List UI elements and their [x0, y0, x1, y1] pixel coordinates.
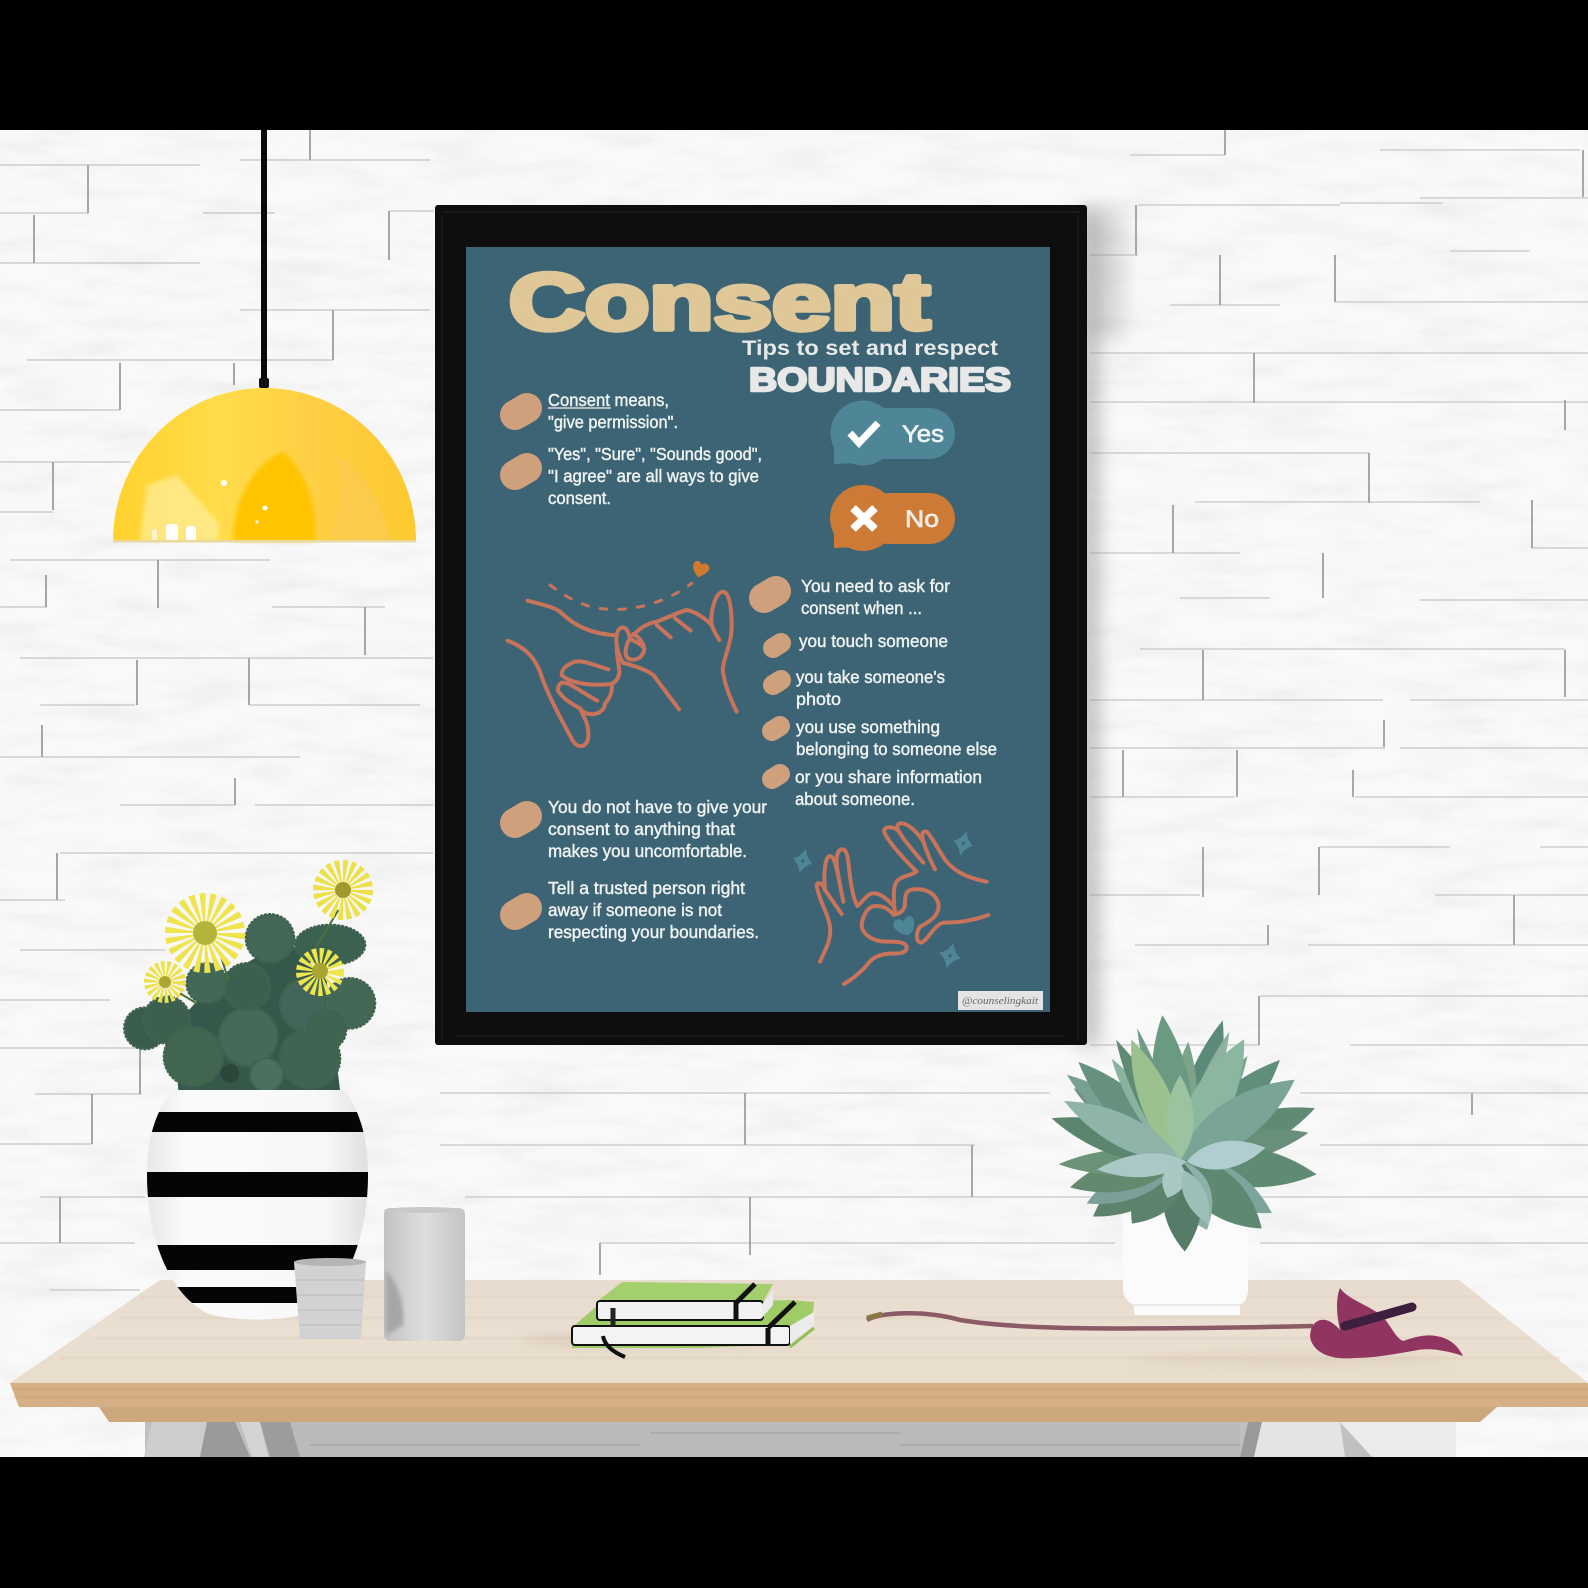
table front edge	[10, 1383, 1588, 1407]
lower notebook	[572, 1300, 814, 1348]
table top	[10, 1280, 1588, 1383]
item: information: about someone.	[795, 789, 915, 809]
area under the table	[145, 1422, 1456, 1457]
bullet	[772, 774, 780, 779]
illustration: pinky promise hands	[508, 561, 737, 746]
tip: uncomfortable: You do not have to give your	[548, 797, 767, 817]
bullet	[773, 643, 781, 648]
black wooden frame	[435, 205, 1087, 1045]
tip: consent means	[548, 390, 678, 432]
icon: sparkles	[790, 829, 976, 972]
icon: yes speech bubble: Yes	[902, 421, 944, 448]
definition tips	[515, 390, 762, 508]
tip: trusted person: away if someone is not	[548, 900, 722, 920]
need consent list	[764, 576, 997, 809]
tip: uncomfortable: consent to anything that	[548, 819, 735, 839]
vase body	[147, 1090, 368, 1320]
tip: consent means: "give permission".	[548, 412, 678, 432]
lamp shade	[113, 388, 416, 541]
lower tips	[515, 797, 767, 942]
bullet	[515, 408, 527, 415]
concrete cup	[294, 1258, 366, 1339]
concrete cylinder	[384, 1207, 465, 1341]
poster background	[466, 247, 1050, 1012]
bloom	[1310, 1288, 1463, 1358]
succulent leaves	[1047, 1013, 1322, 1253]
tip: ways to give consent: "I agree" are all ways to give	[548, 466, 759, 486]
item: information	[795, 767, 982, 809]
item: photo	[796, 667, 945, 709]
upper notebook	[598, 1282, 773, 1304]
anthurium flower	[867, 1288, 1463, 1358]
intro text	[801, 576, 950, 618]
tip: trusted person: Tell a trusted person right	[548, 878, 745, 898]
bullet	[764, 591, 776, 598]
tip: uncomfortable	[548, 797, 767, 861]
watermark: @counselingkait	[962, 995, 1039, 1007]
bullet	[515, 908, 527, 915]
frame shadow	[1080, 208, 1125, 1045]
icon: no speech bubble: No	[905, 506, 939, 533]
flowers	[154, 875, 358, 992]
watermark	[958, 991, 1043, 1010]
heading: BOUNDARIES: BOUNDARIES	[749, 361, 1011, 398]
bullet	[772, 726, 780, 731]
notebooks	[572, 1282, 814, 1357]
tip: uncomfortable: makes you uncomfortable.	[548, 841, 747, 861]
tip: ways to give consent: consent.	[548, 488, 611, 508]
tip: trusted person: respecting your boundaries.	[548, 922, 759, 942]
plant leaves	[124, 910, 375, 1092]
lamp	[113, 130, 416, 542]
table under rail	[99, 1407, 1497, 1422]
table	[10, 1280, 1588, 1457]
item: photo: you take someone's	[796, 667, 945, 687]
tip: consent means: Consent means,	[548, 390, 669, 410]
icon: small heart	[893, 916, 914, 935]
bullet	[515, 816, 527, 823]
item: belongings: belonging to someone else	[796, 739, 997, 759]
succulent plant in white pot	[1047, 1013, 1322, 1315]
item: belongings	[796, 717, 997, 759]
spadix	[1345, 1307, 1412, 1326]
tip: ways to give consent	[548, 444, 762, 508]
bullet	[773, 680, 781, 685]
tip: ways to give consent: "Yes", "Sure", "Sounds good",	[548, 444, 762, 464]
item: photo: photo	[796, 689, 841, 709]
intro text: You need to ask for	[801, 576, 950, 596]
lamp cord	[261, 130, 267, 383]
intro text: consent when ...	[801, 598, 922, 618]
item: information: or you share information	[795, 767, 982, 787]
icon: heart	[693, 561, 709, 577]
item: belongings: you use something	[796, 717, 940, 737]
subtitle: Tips to set and respect	[742, 337, 998, 360]
framed poster	[435, 205, 1125, 1045]
bullet	[515, 468, 527, 475]
tip: trusted person	[548, 878, 759, 942]
stem	[867, 1313, 1313, 1328]
vase with flowers	[124, 875, 375, 1325]
icon: no speech bubble	[830, 485, 955, 551]
icon: yes speech bubble	[830, 400, 955, 466]
white pot	[1123, 1215, 1248, 1315]
illustration: heart hands	[790, 823, 988, 984]
item: touch: you touch someone	[799, 631, 948, 651]
title: Consent: Consent	[509, 257, 930, 346]
